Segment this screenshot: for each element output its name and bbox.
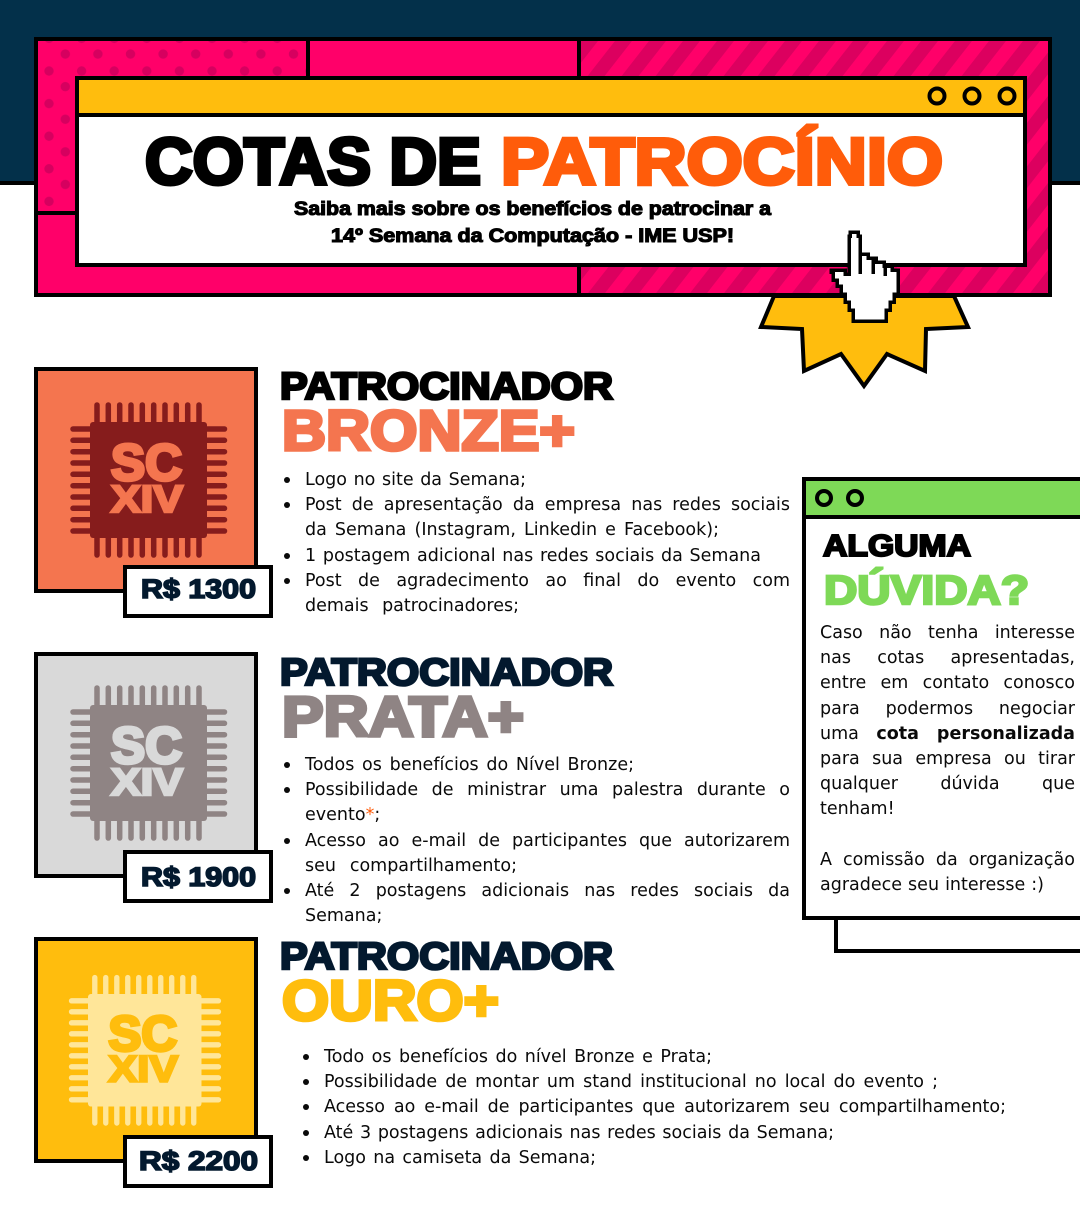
subtitle: 14º Semana da Computação - IME USP! — [331, 226, 734, 247]
card text: para sua empresa ou tirar — [820, 749, 1075, 769]
card text: A comissão da organização — [820, 850, 1075, 870]
panel: prata logo — [34, 652, 273, 903]
card window: DÚVIDA? — [824, 567, 1029, 613]
card text: para podermos negociar — [820, 699, 1075, 719]
list: prata benefits: evento*; — [305, 805, 380, 825]
list: prata benefits — [284, 755, 790, 926]
list: ouro benefits: Possibilidade de montar um stand institucional no local do evento ; — [324, 1072, 938, 1092]
title: COTAS DE — [145, 124, 481, 198]
window control dots — [930, 88, 1014, 104]
price tag: R$ 1300 — [141, 574, 256, 604]
card text: agradece seu interesse :) — [820, 875, 1044, 895]
card window — [802, 477, 1080, 953]
list: ouro benefits: Até 3 postagens adicionais nas redes sociais da Semana; — [324, 1123, 834, 1143]
price tag: R$ 2200 — [139, 1146, 258, 1176]
card text: qualquer dúvida que — [820, 774, 1075, 794]
price tag — [125, 567, 271, 616]
list: bronze benefits — [284, 470, 790, 616]
icon: chip — [73, 405, 224, 555]
title — [145, 124, 943, 198]
card text: tenham! — [820, 799, 895, 819]
icon: chip — [72, 978, 218, 1123]
card window: ALGUMA — [823, 528, 971, 563]
list: bronze benefits: da Semana (Instagram, Linkedin e Facebook); — [305, 520, 719, 540]
icon: chip: XIV — [108, 1048, 179, 1089]
list: bronze benefits: Post de agradecimento ao final do evento com — [305, 571, 790, 591]
list: ouro benefits — [303, 1047, 1006, 1168]
card text: Caso não tenha interesse — [820, 623, 1075, 643]
list: prata benefits: seu compartilhamento; — [305, 856, 517, 876]
pink patterned frame — [36, 39, 1050, 295]
icon: chip: XIV — [111, 479, 184, 521]
list: bronze benefits: Logo no site da Semana; — [305, 470, 526, 490]
list: ouro benefits: Acesso ao e-mail de participantes que autorizarem seu compartilhamento; — [324, 1097, 1006, 1117]
icon: chip: SC — [108, 1006, 177, 1061]
heading: patrocinador ouro — [280, 938, 615, 1028]
icon: chip — [73, 688, 224, 838]
list: prata benefits: Semana; — [305, 906, 382, 926]
panel: ouro logo — [34, 937, 273, 1188]
icon: chip: SC — [111, 717, 182, 774]
heading: patrocinador prata — [280, 654, 615, 744]
list: prata benefits: Possibilidade de ministrar uma palestra durante o — [305, 780, 790, 800]
list: ouro benefits: Todo os benefícios do nível Bronze e Prata; — [324, 1047, 712, 1067]
icon: pixel hand cursor — [831, 232, 898, 321]
title: PATROCÍNIO — [501, 124, 943, 198]
subtitle — [294, 199, 771, 247]
list: prata benefits: Até 2 postagens adicionais nas redes sociais da — [305, 881, 790, 901]
heading: patrocinador bronze — [280, 368, 615, 458]
list: prata benefits: Acesso ao e-mail de participantes que autorizarem — [305, 831, 790, 851]
panel: alguma dúvida card — [802, 477, 1080, 953]
price tag — [125, 1137, 271, 1186]
card text: uma cota personalizada — [820, 724, 1075, 744]
price tag: R$ 1900 — [141, 862, 256, 892]
navy top band — [0, 0, 1080, 185]
list: bronze benefits: Post de apresentação da empresa nas redes sociais — [305, 495, 790, 515]
card text: entre em contato conosco — [820, 673, 1075, 693]
icon: chip: XIV — [111, 762, 184, 804]
icon: chip: SC — [111, 434, 182, 491]
list: bronze benefits: 1 postagem adicional nas redes sociais da Semana — [305, 546, 761, 566]
price tag — [125, 852, 271, 901]
header banner — [0, 0, 1080, 390]
card text — [820, 623, 1075, 895]
list: bronze benefits: demais patrocinadores; — [305, 596, 519, 616]
subtitle: Saiba mais sobre os benefícios de patrocinar a — [294, 199, 771, 220]
card text: nas cotas apresentadas, — [820, 648, 1075, 668]
burst star — [761, 296, 968, 386]
panel: bronze logo — [34, 367, 273, 618]
list: ouro benefits: Logo na camiseta da Semana; — [324, 1148, 596, 1168]
list: prata benefits: Todos os benefícios do Nível Bronze; — [305, 755, 634, 775]
title window — [77, 78, 1025, 265]
